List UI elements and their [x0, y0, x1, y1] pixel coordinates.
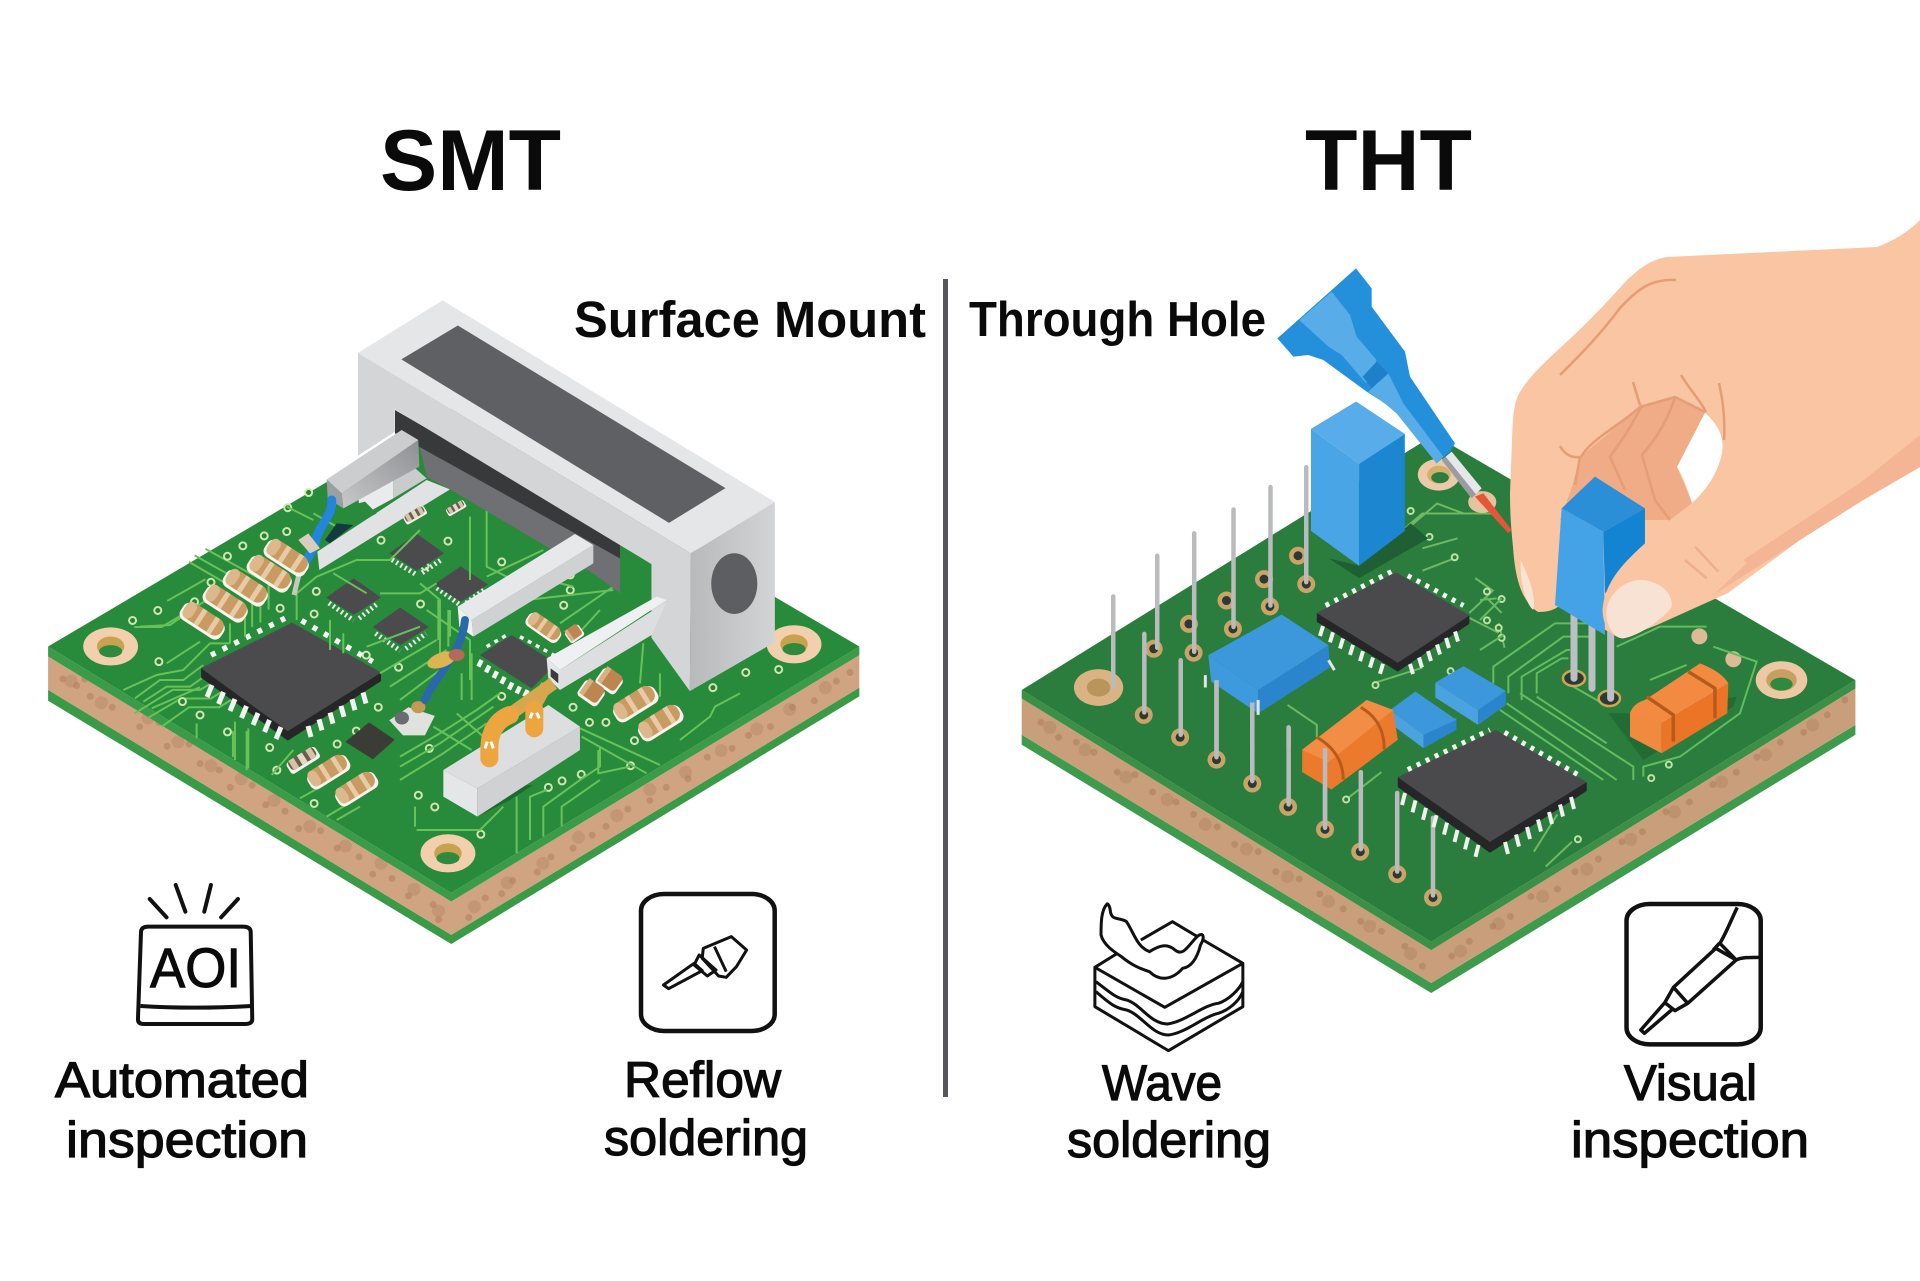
mounting hole right: [767, 625, 821, 663]
center divider: [943, 279, 948, 1097]
AOI label in icon: AOI: [150, 936, 241, 999]
QFP chip lower body: [1398, 730, 1587, 853]
QFP chip large: [201, 618, 381, 741]
arm one top: [327, 430, 418, 493]
board traces: [1480, 598, 1757, 780]
pad ring right: [1599, 691, 1620, 706]
label: Wave soldering: [1067, 1055, 1271, 1168]
tool lower facet: [1368, 373, 1443, 463]
copper traces: [1287, 504, 1572, 867]
side face: [690, 502, 775, 691]
mounting ring top: [1418, 459, 1460, 491]
held component and thumb: [1521, 477, 1747, 638]
board bottom layer: [1022, 725, 1855, 993]
subtitle: Through Hole: Through Hole: [969, 293, 1266, 347]
connector body: [358, 300, 775, 691]
capacitor bands: [1647, 672, 1715, 742]
pins over orange capacitor: [1289, 727, 1325, 828]
round hole: [711, 553, 757, 614]
board face: [48, 408, 859, 893]
orange capacitor one: [1302, 700, 1398, 790]
label: Reflow soldering: [604, 1052, 808, 1166]
reflow tool: [663, 937, 747, 989]
mounting ring middle: [1468, 491, 1496, 513]
hand shape: [1510, 220, 1920, 638]
component left face: [1555, 508, 1605, 635]
board face: [1022, 435, 1855, 942]
board bottom layer: [48, 688, 859, 944]
white lead below wire: [294, 570, 300, 595]
hand creases: [1560, 280, 1724, 520]
copper traces: [134, 549, 269, 770]
board core: [48, 655, 859, 935]
component right face: [1603, 508, 1645, 593]
wave block: [1095, 922, 1243, 1051]
lower rail: [317, 480, 450, 570]
traces small pad centers: [1346, 511, 1669, 839]
label: Automated inspection: inspection: [66, 1112, 308, 1168]
icon: AOI inspection: [138, 885, 252, 1024]
chip E leads: [478, 660, 528, 697]
traces small pads: [1346, 511, 1669, 839]
icon: wave soldering: [1095, 904, 1243, 1051]
QFP chip upper body: [1317, 571, 1469, 672]
subtitle: Surface Mount: Surface Mount: [574, 291, 926, 348]
pins: [1574, 597, 1611, 698]
illustration: SMT circuit board: [48, 408, 859, 944]
chip E body: [480, 635, 548, 688]
orange wire top: [507, 683, 553, 717]
opening stripe: [395, 410, 620, 558]
small blue block two: [1390, 692, 1456, 748]
tool metal shade: [1442, 457, 1476, 498]
arm two end: [458, 607, 473, 637]
solder blob: [425, 648, 458, 672]
component top face: [1562, 477, 1645, 532]
arm three top: [547, 597, 667, 670]
large chip leads: [207, 685, 366, 739]
chip E top dots: [487, 635, 557, 657]
visual tool: [1641, 907, 1761, 1033]
arm one end: [327, 479, 343, 508]
palm lower shade: [1713, 435, 1920, 595]
header block left: [443, 770, 477, 817]
title: THT: THT: [1305, 113, 1472, 209]
header shadow: [443, 785, 533, 817]
chip E and large chip leads: [207, 635, 557, 739]
mounting pad left: [1074, 669, 1123, 706]
AOI rays: [150, 885, 238, 917]
tool metal collar: [1442, 452, 1482, 498]
dark gap: [325, 523, 353, 543]
dark mixed component: [345, 701, 435, 759]
AOI keycap: [138, 927, 252, 1024]
visual frame: [1627, 904, 1761, 1044]
rail strut right: [393, 467, 427, 498]
arm two top: [458, 534, 593, 620]
top window: [401, 326, 725, 523]
arm three end: [547, 658, 560, 690]
connector rail and opening: [317, 410, 620, 593]
small copper pads: [1699, 636, 1733, 659]
opening: [395, 420, 620, 593]
tiny part on wire: [298, 533, 320, 553]
label: Reflow soldering: soldering: [604, 1110, 808, 1166]
label: Automated inspection: Automated: [55, 1052, 309, 1108]
THT chip leads: [1320, 626, 1574, 857]
small chip A: [389, 534, 444, 575]
body front: [358, 353, 691, 691]
blue wire two: [425, 620, 465, 700]
label: Wave soldering: Wave: [1102, 1055, 1222, 1111]
pin highlights: [485, 713, 539, 748]
blue flat component: [1205, 614, 1334, 715]
icon: visual inspection: [1627, 904, 1761, 1044]
label: Reflow soldering: Reflow: [624, 1052, 782, 1108]
arm one side: [342, 440, 419, 508]
reflow frame: [641, 894, 775, 1031]
tool red tip: [1475, 493, 1512, 533]
orange wire right: [535, 685, 547, 707]
thumb nail: [1606, 580, 1672, 638]
blue wire one: [302, 500, 332, 570]
fingertip nail: [1521, 560, 1534, 610]
core speckles small: [63, 672, 850, 920]
finger shading: [1560, 397, 1705, 520]
pin row: [1113, 467, 1433, 895]
arm three inner: [551, 668, 558, 683]
SMT capacitors left row: [177, 536, 313, 642]
gap under arm: [352, 502, 377, 523]
small blue block one: [1435, 666, 1506, 725]
pad holes: [1144, 556, 1433, 897]
header block right: [477, 727, 580, 817]
title: SMT: SMT: [380, 113, 561, 209]
connector arms one and two: [294, 430, 593, 700]
solder splash: [1101, 904, 1203, 978]
header block top: [443, 705, 580, 788]
orange pin right: [525, 710, 543, 728]
thumb creases: [1685, 547, 1718, 578]
tool band: [1363, 362, 1388, 388]
small chip D: [434, 566, 488, 605]
pad ring left: [1563, 671, 1585, 686]
mounting hole left: [83, 627, 138, 666]
SMT traces detail: lower left: [123, 610, 360, 820]
label: Visual inspection: inspection: [1571, 1112, 1809, 1168]
orange capacitor top: [1630, 663, 1728, 723]
orange pin left: [489, 715, 510, 758]
blue tweezer tool: [1277, 268, 1512, 533]
small chip B: [326, 578, 381, 620]
rail strut left: [358, 477, 393, 517]
arm two side: [472, 545, 593, 637]
SMT traces detail: middle: [287, 507, 613, 700]
colored blob: [449, 649, 465, 661]
core speckles large: [71, 681, 825, 911]
mounting hole bottom: [421, 834, 475, 872]
core speckles small: [1041, 700, 1845, 966]
board lip: [1022, 680, 1855, 950]
orange capacitor shadow: [1608, 697, 1737, 760]
label: Visual inspection: Visual: [1624, 1055, 1757, 1111]
body top: [358, 300, 775, 553]
tool body: [1277, 268, 1455, 463]
illustration: THT circuit board: [1022, 402, 1855, 993]
pad rings: [1144, 556, 1433, 897]
thumb: [1603, 503, 1747, 638]
tool upper facet: [1299, 292, 1377, 383]
orange capacitor side: [1662, 683, 1728, 753]
orange capacitor end: [1630, 700, 1662, 753]
icon: reflow soldering: [641, 894, 775, 1031]
core speckles large: [1050, 725, 1813, 954]
tall blue component: [1311, 402, 1428, 578]
connector arm three and header: [443, 597, 667, 817]
label: Wave soldering: soldering: [1067, 1112, 1271, 1168]
board core: [1022, 689, 1855, 983]
gap between fingers: [1677, 413, 1723, 503]
board lip: [48, 646, 859, 901]
solder pads outer: [133, 493, 779, 834]
label: Automated inspection: [55, 1052, 309, 1168]
small chip C: [373, 607, 429, 651]
arm three side: [560, 602, 667, 690]
SMT capacitors lower and right: [285, 499, 686, 809]
hand: [1510, 220, 1920, 638]
label: Visual inspection: [1571, 1055, 1809, 1168]
THT right side traces and parts: [1480, 597, 1757, 780]
solder pads inner: [133, 493, 779, 834]
SMT traces detail: lower right: [400, 600, 740, 853]
front pins over flat component: [1216, 680, 1252, 781]
mounting ring right: [1756, 661, 1807, 699]
